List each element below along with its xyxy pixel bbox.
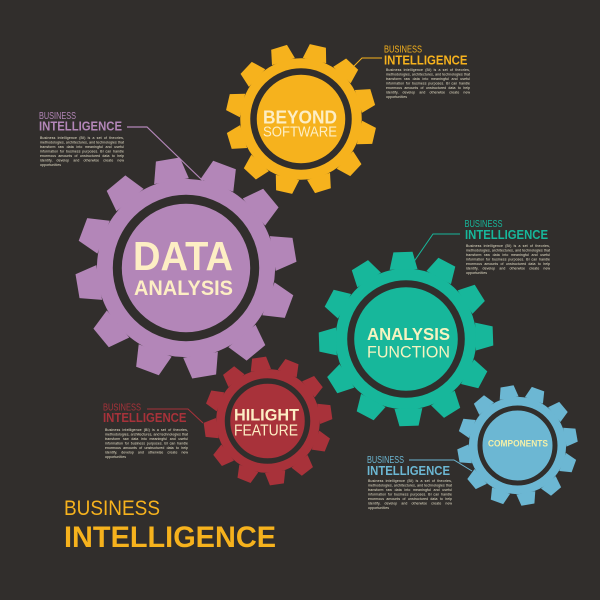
text block: teal label: transform raw data into meaningful and useful: [466, 253, 550, 257]
text block: yellow label: enormous amounts of unstructured data to help: [386, 86, 470, 90]
text block: teal label: identify, develop and otherwise create new: [466, 266, 550, 270]
text block: teal label: INTELLIGENCE: [465, 228, 548, 242]
text block: yellow label: transform raw data into meaningful and useful: [386, 77, 470, 81]
text block: teal label: Business intelligence (BI) is a set of theories,: [466, 244, 550, 248]
text block: blue label: [367, 455, 452, 510]
gear: data analysis (purple): ANALYSIS: [134, 277, 233, 300]
text block: red label: [103, 403, 188, 459]
text block: blue label: identify, develop and otherwise create new: [368, 502, 452, 506]
text block: teal label: opportunities: [466, 271, 487, 275]
text block: yellow label: BUSINESS: [384, 44, 422, 55]
text block: purple label: methodologies, architectures, and technologies that: [40, 140, 124, 144]
gear: hilight feature (red): [196, 349, 340, 493]
leader arrow: teal: [413, 234, 460, 263]
text block: purple label: enormous amounts of unstructured data to help: [40, 154, 124, 158]
text block: teal label: enormous amounts of unstructured data to help: [466, 262, 550, 266]
text block: teal label: information for business purposes. BI can handle: [466, 258, 550, 262]
leader arrow: red: [147, 409, 203, 423]
text block: purple label: Business intelligence (BI) is a set of theories,: [40, 136, 124, 140]
gear: analysis function (teal): [316, 249, 496, 429]
leader arrow: blue: [409, 460, 472, 471]
text block: yellow label: identify, develop and otherwise create new: [386, 90, 470, 94]
gear: beyond software (yellow): BEYOND: [263, 106, 337, 128]
text block: purple label: INTELLIGENCE: [39, 120, 122, 134]
text block: red label: INTELLIGENCE: [103, 411, 186, 425]
gear: analysis function (teal): ANALYSIS: [367, 324, 450, 344]
title: INTELLIGENCE: [64, 521, 276, 554]
text block: blue label: opportunities: [368, 506, 389, 510]
text block: red label: transform raw data into meaningful and useful: [105, 437, 188, 441]
text block: red label: BUSINESS: [103, 403, 141, 414]
text block: purple label: BUSINESS: [39, 111, 76, 122]
gear: beyond software (yellow): SOFTWARE: [263, 124, 337, 141]
text block: yellow label: information for business purposes. BI can handle: [386, 82, 470, 86]
text block: yellow label: INTELLIGENCE: [384, 53, 468, 67]
text block: red label: information for business purposes. BI can handle: [105, 442, 188, 446]
gear: hilight feature (red): FEATURE: [234, 423, 298, 440]
gear: hilight feature (red): HILIGHT: [234, 407, 299, 425]
text block: blue label: enormous amounts of unstructured data to help: [368, 497, 452, 501]
text block: teal label: BUSINESS: [464, 219, 503, 230]
text block: blue label: information for business purposes. BI can handle: [368, 492, 452, 496]
title: BUSINESS: [64, 497, 160, 520]
text block: blue label: methodologies, architectures, and technologies that: [368, 484, 452, 488]
text block: blue label: INTELLIGENCE: [367, 464, 450, 478]
leader arrow: yellow: [353, 58, 382, 67]
text block: blue label: transform raw data into meaningful and useful: [368, 488, 452, 492]
gear: data analysis (purple): [59, 141, 313, 395]
text block: purple label: identify, develop and otherwise create new: [40, 158, 124, 162]
text block: purple label: transform raw data into meaningful and useful: [40, 145, 124, 149]
text block: yellow label: opportunities: [386, 95, 407, 99]
gear: analysis function (teal): FUNCTION: [367, 342, 450, 361]
gear: beyond software (yellow): [211, 29, 391, 209]
text block: teal label: methodologies, architectures, and technologies that: [466, 248, 550, 252]
text block: teal label: [464, 219, 550, 275]
text block: purple label: opportunities: [40, 163, 61, 167]
text block: purple label: information for business purposes. BI can handle: [40, 150, 124, 154]
text block: red label: enormous amounts of unstructured data to help: [105, 446, 188, 450]
text block: blue label: Business intelligence (BI) is a set of theories,: [368, 479, 452, 483]
text block: red label: identify, develop and otherwise create new: [105, 450, 188, 454]
text block: yellow label: Business intelligence (BI) is a set of theories,: [386, 68, 470, 72]
title: [64, 497, 276, 554]
text block: purple label: [39, 111, 124, 167]
text block: red label: methodologies, architectures, and technologies that: [105, 432, 188, 436]
text block: yellow label: methodologies, architectures, and technologies that: [386, 72, 470, 76]
leader arrow: purple: [127, 127, 203, 181]
gear: components (blue): COMPONENTS: [488, 439, 548, 449]
text block: yellow label: [384, 44, 470, 99]
text block: red label: opportunities: [105, 455, 126, 459]
gear: data analysis (purple): DATA: [133, 233, 233, 279]
text block: red label: Business intelligence (BI) is a set of theories,: [105, 428, 188, 432]
text block: blue label: BUSINESS: [367, 455, 404, 466]
gear: components (blue): [448, 376, 587, 515]
